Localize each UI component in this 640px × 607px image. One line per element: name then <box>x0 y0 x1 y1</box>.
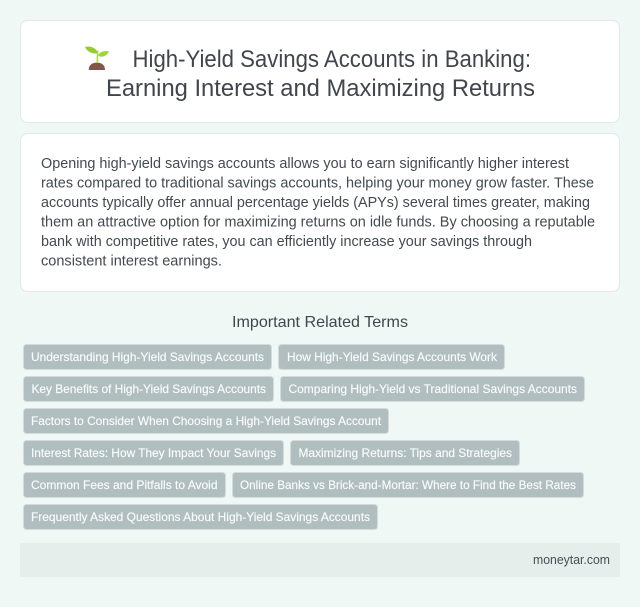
tag: Interest Rates: How They Impact Your Savings <box>31 446 276 460</box>
panel: intro paragraph: accounts typically offer annual percentage yields (APYs) several times greater, making <box>41 195 590 211</box>
tag: Factors to Consider When Choosing a High-Yield Savings Account <box>31 414 382 428</box>
tag <box>290 440 520 466</box>
tag: Online Banks vs Brick-and-Mortar: Where to Find the Best Rates <box>240 478 576 492</box>
panel: intro paragraph: consistent interest earnings. <box>41 254 222 270</box>
footer <box>20 543 620 577</box>
tag: Common Fees and Pitfalls to Avoid <box>31 478 218 492</box>
heading: related terms: Important Related Terms <box>232 314 408 331</box>
icon: sprout <box>85 47 109 70</box>
footer: moneytar.com <box>533 552 610 567</box>
panel: intro paragraph: them an attractive option for maximizing returns on idle funds. By choosing a reputable <box>41 214 595 230</box>
tag: Comparing High-Yield vs Traditional Savings Accounts <box>288 382 577 396</box>
panel: intro paragraph <box>20 134 620 292</box>
tag list: related terms <box>24 344 584 530</box>
panel: intro paragraph: bank with competitive rates, you can efficiently increase your savings through <box>41 234 532 250</box>
tag <box>24 408 388 434</box>
tag: Key Benefits of High-Yield Savings Accounts <box>32 382 266 396</box>
title <box>106 46 535 102</box>
tag <box>24 440 284 466</box>
title: Earning Interest and Maximizing Returns <box>106 75 535 102</box>
tag <box>24 344 272 370</box>
tag: Maximizing Returns: Tips and Strategies <box>298 446 512 460</box>
tag <box>232 472 584 498</box>
tag <box>24 504 378 530</box>
panel: title card <box>20 20 620 122</box>
tag: Understanding High-Yield Savings Accounts <box>31 350 264 364</box>
panel: intro paragraph: Opening high-yield savings accounts allows you to earn significantly higher interest <box>41 156 569 172</box>
tag <box>24 472 226 498</box>
tag <box>278 344 504 370</box>
tag <box>280 376 584 402</box>
tag: Frequently Asked Questions About High-Yield Savings Accounts <box>31 510 370 524</box>
tag <box>24 376 274 402</box>
panel: intro paragraph: rates compared to traditional savings accounts, helping your money grow faster. These <box>41 176 594 192</box>
tag: How High-Yield Savings Accounts Work <box>287 350 498 364</box>
title: High-Yield Savings Accounts in Banking: <box>132 46 531 73</box>
